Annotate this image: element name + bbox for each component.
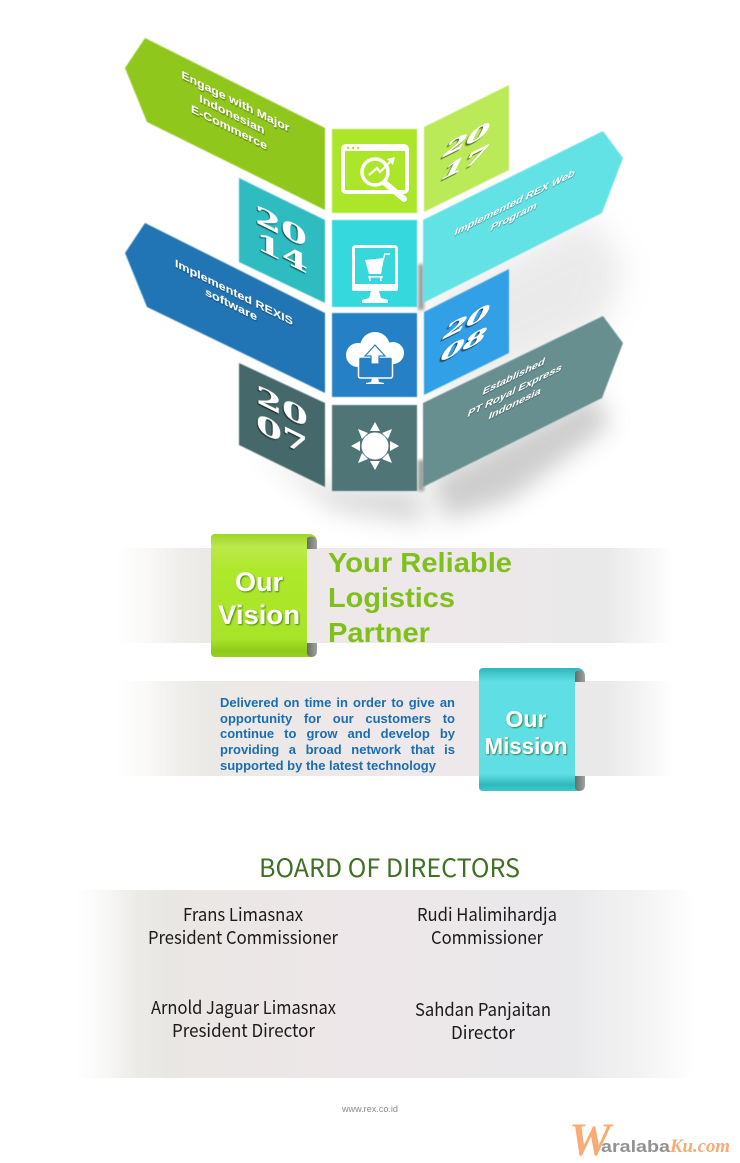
ribbon: Our Mission (479, 668, 585, 791)
ribbon: Our Mission: Our (506, 706, 546, 732)
panel: 2007 (239, 363, 325, 487)
director: Arnold Jaguar Limasnax (151, 994, 336, 1043)
year: 2017: 17 (436, 138, 494, 187)
label: Established PT Royal Express Indonesia: Indonesia (487, 384, 543, 423)
timeline stack (125, 38, 623, 491)
ribbon: Our Mission: Mission (484, 733, 568, 759)
logo: WaralabaKu.com (569, 1114, 730, 1163)
year: 2017: 20 (438, 115, 496, 164)
vision statement: Partner (328, 617, 430, 648)
panel: Engage with Major Indonesian E-Commerce arrow (125, 38, 325, 210)
director: Sahdan Panjaitan: Director (451, 1019, 516, 1045)
vision band (115, 548, 675, 643)
year: 2014: 14 (256, 226, 308, 281)
ribbon: Our Vision (211, 534, 317, 657)
vision statement: Logistics (328, 582, 455, 613)
director: Rudi Halimihardja: Commissioner (431, 924, 544, 950)
heading: Board of Directors: BOARD OF DIRECTORS (259, 849, 520, 885)
year: 2017 (436, 115, 496, 187)
label: Implemented REXIS software: Implemented REXIS (175, 257, 293, 328)
board band (75, 890, 695, 1078)
year: 2008 (435, 297, 496, 369)
icon: cloud upload (346, 332, 404, 384)
year: 2007: 20 (256, 380, 308, 435)
label: Engage with Major Indonesian E-Commerce: Indonesian (200, 92, 264, 137)
logo: WaralabaKu.com: aralaba (601, 1137, 671, 1156)
label: Established PT Royal Express Indonesia: Established (481, 354, 547, 398)
vision statement: Your Reliable (328, 547, 512, 578)
director: Rudi Halimihardja (417, 901, 557, 950)
panel: Implemented REXIS software arrow (125, 223, 325, 393)
ribbon: Our Vision: Our (235, 567, 283, 597)
director: Sahdan Panjaitan: Sahdan Panjaitan (415, 996, 551, 1022)
panel: 2017 (424, 85, 509, 212)
mission statement: Delivered on time in order to give an opportunity for our customers to continue to grow and develop by providing a broad network that is supported by the latest technology (220, 695, 455, 773)
icon: shopping cart on monitor (352, 246, 398, 303)
ribbon: Our Vision: Vision (218, 600, 300, 630)
label: Engage with Major Indonesian E-Commerce: E-Commerce (191, 103, 268, 153)
director: Arnold Jaguar Limasnax: President Director (172, 1017, 316, 1043)
year: 2014: 20 (255, 200, 307, 255)
panel: sun icon square (332, 405, 417, 491)
mission band (115, 681, 675, 776)
director: Sahdan Panjaitan (415, 996, 551, 1045)
panel: 2014 (239, 178, 325, 303)
label: Engage with Major Indonesian E-Commerce: Engage with Major (182, 69, 290, 135)
director: Frans Limasnax: Frans Limasnax (183, 901, 303, 927)
icon: sun (351, 422, 399, 470)
director: Frans Limasnax: President Commissioner (148, 924, 339, 950)
year: 2008: 20 (438, 297, 496, 346)
panel: search icon square (332, 129, 417, 213)
panel: Implemented REX Web Program arrow (423, 131, 623, 303)
label: Implemented REX Web Program: Implemented REX Web (453, 166, 577, 239)
label: Engage with Major Indonesian E-Commerce (182, 69, 290, 153)
label: Implemented REX Web Program: Program (489, 198, 539, 234)
label: Implemented REXIS software: software (205, 286, 258, 324)
panel: Established PT Royal Express Indonesia arrow (423, 316, 623, 487)
year: 2007: 07 (256, 408, 308, 463)
label: Established PT Royal Express Indonesia: PT Royal Express (466, 360, 564, 420)
logo: WaralabaKu.com: Ku.com (669, 1136, 730, 1157)
director: Rudi Halimihardja: Rudi Halimihardja (417, 901, 557, 927)
panel: 2008 (424, 269, 509, 395)
vision statement (328, 547, 512, 648)
year: 2014 (255, 200, 308, 281)
icon: website analytics magnifier (343, 145, 407, 199)
website: www.rex.co.id (341, 1104, 398, 1114)
director: Frans Limasnax (148, 901, 339, 950)
shadow under timeline stack (255, 215, 625, 525)
panel: cart icon square (332, 220, 417, 307)
year: 2008: 08 (435, 320, 493, 369)
panel: cloud icon square (332, 313, 417, 397)
year: 2007 (256, 380, 308, 463)
director: Arnold Jaguar Limasnax: Arnold Jaguar Limasnax (151, 994, 336, 1020)
